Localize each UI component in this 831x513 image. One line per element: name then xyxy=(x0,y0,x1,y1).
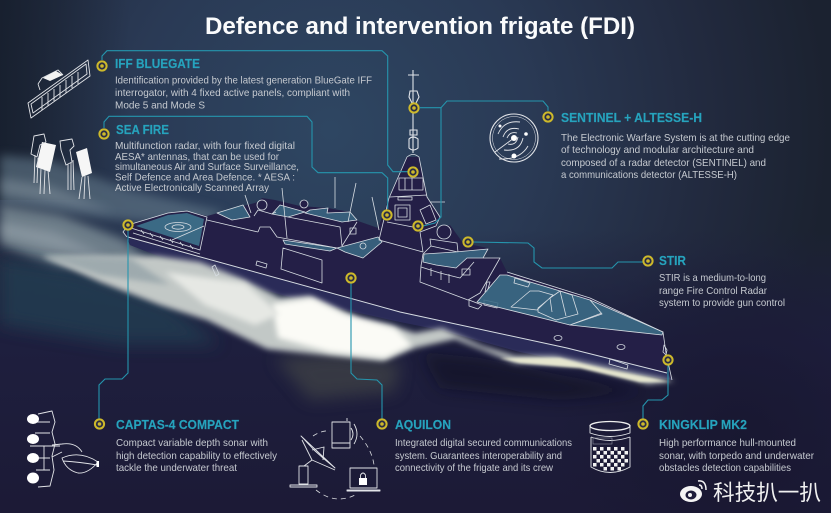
icon: radar xyxy=(490,114,538,162)
panel: Sea Fire: SEA FIRE xyxy=(116,123,169,137)
panel: Kingklip Mk2: obstacles detection capabilities xyxy=(659,463,791,474)
panel: Sea Fire: simultaneous Air and Surface Surveillance, xyxy=(115,162,299,173)
panel: Sentinel + Altesse-H xyxy=(490,111,790,181)
panel: Sentinel + Altesse-H: of technology and modular architecture and xyxy=(561,145,754,156)
panel: STIR: STIR xyxy=(659,254,686,268)
panel: Sea Fire: Multifunction radar, with four fixed digital xyxy=(115,141,295,152)
panel: IFF BlueGate: Mode 5 and Mode S xyxy=(115,100,205,112)
icon: towed sonar xyxy=(27,411,99,487)
icon: weibo logo xyxy=(680,481,706,502)
forward superstructure and bridge xyxy=(420,225,500,309)
marker dots xyxy=(95,61,673,429)
panel: Captas-4 Compact: CAPTAS-4 COMPACT xyxy=(116,418,239,432)
panel: STIR: STIR is a medium-to-long xyxy=(659,273,766,284)
hangar and mid superstructure xyxy=(207,177,382,283)
panel: STIR: system to provide gun control xyxy=(659,298,785,309)
mast and tower xyxy=(379,70,445,252)
panel: IFF BlueGate xyxy=(28,57,372,118)
panel: Sea Fire xyxy=(31,123,299,199)
panel: Sentinel + Altesse-H: SENTINEL + ALTESSE-H xyxy=(561,111,702,125)
foam wake along hull xyxy=(42,256,675,384)
title: Defence and intervention frigate (FDI) xyxy=(205,13,635,40)
panel: Kingklip Mk2: KINGKLIP MK2 xyxy=(659,418,747,432)
panel: Aquilon: connectivity of the frigate and its crew xyxy=(395,463,554,474)
panel: Captas-4 Compact: tackle the underwater threat xyxy=(116,463,237,474)
panel: Sea Fire: Active Electronically Scanned Array xyxy=(115,183,270,194)
icon: hull sonar xyxy=(590,422,630,472)
panel: Kingklip Mk2 xyxy=(590,418,815,474)
panel: IFF BlueGate: Identification provided by the latest generation BlueGate IFF xyxy=(115,76,372,86)
panel: Sea Fire: Self Defence and Area Defence. * AESA : xyxy=(115,172,295,184)
panel: Kingklip Mk2: High performance hull-mounted xyxy=(659,438,796,449)
panel: Sentinel + Altesse-H: a communications detector (ALTESSE-H) xyxy=(561,170,737,181)
panel: STIR: range Fire Control Radar xyxy=(659,286,768,297)
panel: Captas-4 Compact xyxy=(27,411,278,487)
icon: IFF panel xyxy=(28,60,90,118)
panel: IFF BlueGate: interrogator, with 4 fixed active panels, compliant with xyxy=(115,88,350,99)
connector lines xyxy=(99,51,668,419)
panel: Aquilon: AQUILON xyxy=(395,418,451,432)
panel: Kingklip Mk2: sonar, with torpedo and underwater xyxy=(659,451,815,462)
panel: Aquilon: system. Guarantees interoperability and xyxy=(395,451,562,462)
helicopter deck xyxy=(123,211,207,254)
foredeck and gun xyxy=(477,272,672,380)
panel: Captas-4 Compact: high detection capability to effectively xyxy=(116,451,278,462)
panel: Sentinel + Altesse-H: composed of a radar detector (SENTINEL) and xyxy=(561,158,766,169)
panel: Aquilon xyxy=(290,418,572,499)
panel: Captas-4 Compact: Compact variable depth sonar with xyxy=(116,438,268,449)
icon: secure communications xyxy=(290,418,380,499)
ship hull and superstructure xyxy=(42,70,675,384)
panel: Aquilon: Integrated digital secured communications xyxy=(395,438,572,449)
panel: Sea Fire: AESA* antennas, that can be used for xyxy=(115,152,280,163)
icon: Sea Fire antennas xyxy=(31,134,92,199)
panel: STIR xyxy=(659,254,785,309)
watermark: 科技扒一扒 xyxy=(713,481,821,505)
panel: Sentinel + Altesse-H: The Electronic Warfare System is at the cutting edge xyxy=(561,133,790,144)
panel: IFF BlueGate: IFF BLUEGATE xyxy=(115,57,200,71)
